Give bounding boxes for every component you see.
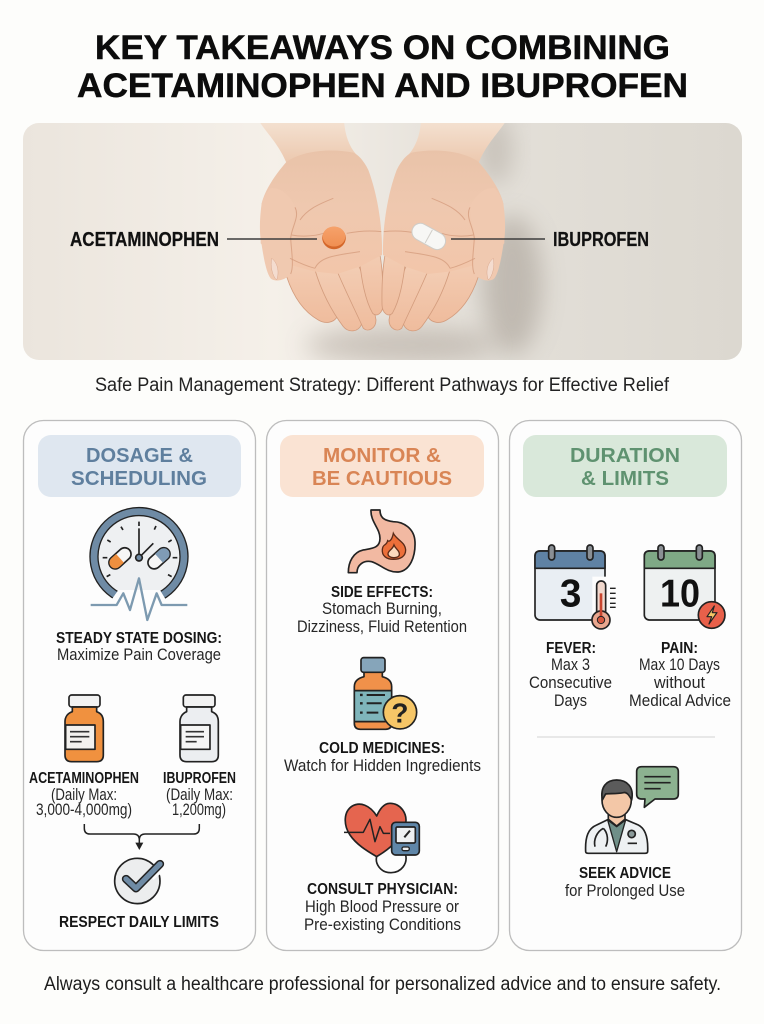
text: acetaminophen daily max: (Daily Max: — [51, 786, 117, 804]
panel: monitor and be cautious — [266, 420, 498, 950]
text: respect daily limits: RESPECT DAILY LIMITS — [59, 914, 219, 931]
arrow: bracket to daily limits — [84, 824, 199, 850]
heading: duration and limits: & LIMITS — [581, 467, 669, 490]
icon: calendar 10 with pain bolt — [644, 545, 725, 628]
text: pain limit — [629, 640, 731, 710]
icon: white ibuprofen bottle — [180, 695, 218, 762]
icon: calendar 10 with pain bolt: 10 — [660, 573, 700, 616]
subtitle: Safe Pain Management Strategy: Different Pathways for Effective Relief — [95, 375, 670, 396]
text: ibuprofen daily max: 1,200mg) — [172, 801, 226, 819]
text: consult physician: Pre-existing Conditions — [304, 916, 461, 934]
title — [77, 29, 688, 105]
heading: duration and limits: DURATION — [570, 444, 680, 467]
panel: duration and limits — [510, 420, 742, 950]
text: pain limit: without — [653, 674, 705, 692]
label: ibuprofen: IBUPROFEN — [553, 229, 649, 251]
text: acetaminophen daily max — [29, 770, 139, 819]
text: acetaminophen daily max: 3,000-4,000mg) — [36, 801, 132, 819]
text: fever limit — [529, 640, 612, 710]
text: steady state dosing — [56, 630, 222, 664]
heading: dosage and scheduling: DOSAGE & — [86, 444, 193, 467]
pointer line right — [451, 238, 545, 240]
icon: white ibuprofen caplet — [409, 220, 449, 253]
text: ibuprofen daily max: IBUPROFEN — [163, 770, 236, 787]
text: steady state dosing: STEADY STATE DOSING: — [56, 630, 222, 647]
text: pain limit: PAIN: — [661, 640, 698, 657]
icon: check mark in circle — [115, 858, 163, 904]
heading: monitor and be cautious: BE CAUTIOUS — [312, 467, 452, 490]
icon: orange acetaminophen pill — [322, 226, 346, 249]
heading: dosage and scheduling — [38, 435, 241, 497]
text: seek advice: SEEK ADVICE — [579, 865, 671, 882]
text: ibuprofen daily max — [163, 770, 236, 819]
text: fever limit: FEVER: — [546, 640, 596, 657]
label: acetaminophen: ACETAMINOPHEN — [70, 229, 219, 251]
icon: cold medicine bottle with question mark: ? — [391, 698, 409, 729]
text: steady state dosing: Maximize Pain Coverage — [57, 646, 221, 664]
panel: hero photo of hands holding pills — [23, 115, 742, 363]
text: ibuprofen daily max: (Daily Max: — [166, 786, 233, 804]
icon: calendar 3 with thermometer — [535, 545, 616, 630]
text: side effects: SIDE EFFECTS: — [331, 584, 433, 601]
text: side effects — [297, 584, 467, 636]
text: consult physician: CONSULT PHYSICIAN: — [307, 881, 458, 898]
pointer line left — [227, 238, 317, 240]
icon: left hand — [258, 120, 383, 331]
icon: calendar 3 with thermometer: 3 — [560, 573, 581, 616]
icon: doctor with speech bubble — [586, 767, 678, 853]
heading: duration and limits — [523, 435, 727, 497]
icon: cold medicine bottle with question mark — [354, 658, 417, 729]
text: acetaminophen daily max: ACETAMINOPHEN — [29, 770, 139, 787]
text: consult physician: High Blood Pressure or — [305, 898, 459, 916]
text: fever limit: Max 3 — [551, 656, 590, 674]
text: cold medicines: Watch for Hidden Ingredients — [284, 757, 481, 775]
footer note: Always consult a healthcare professional for personalized advice and to ensure safety. — [44, 974, 721, 995]
text: cold medicines: COLD MEDICINES: — [319, 740, 445, 757]
text: consult physician — [304, 881, 461, 934]
icon: clock with capsules and heartbeat — [91, 512, 187, 620]
text: pain limit: Medical Advice — [629, 692, 731, 710]
text: side effects: Stomach Burning, — [322, 600, 442, 618]
icon: stomach with flame — [348, 510, 415, 573]
title: ACETAMINOPHEN AND IBUPROFEN — [77, 67, 688, 105]
heading: dosage and scheduling: SCHEDULING — [71, 467, 207, 490]
heading: monitor and be cautious: MONITOR & — [323, 444, 441, 467]
icon: orange acetaminophen bottle — [65, 695, 103, 762]
icon: right hand — [382, 120, 507, 331]
text: seek advice: for Prolonged Use — [565, 882, 685, 900]
text: cold medicines — [284, 740, 481, 775]
panel: dosage and scheduling — [24, 420, 256, 950]
text: pain limit: Max 10 Days — [639, 656, 720, 674]
text: fever limit: Days — [554, 692, 587, 710]
icon: heart with blood pressure monitor — [344, 803, 419, 873]
text: seek advice — [565, 865, 685, 900]
heading: monitor and be cautious — [280, 435, 484, 497]
text: fever limit: Consecutive — [529, 674, 612, 692]
text: side effects: Dizziness, Fluid Retention — [297, 618, 467, 636]
title: KEY TAKEAWAYS ON COMBINING — [95, 29, 670, 67]
